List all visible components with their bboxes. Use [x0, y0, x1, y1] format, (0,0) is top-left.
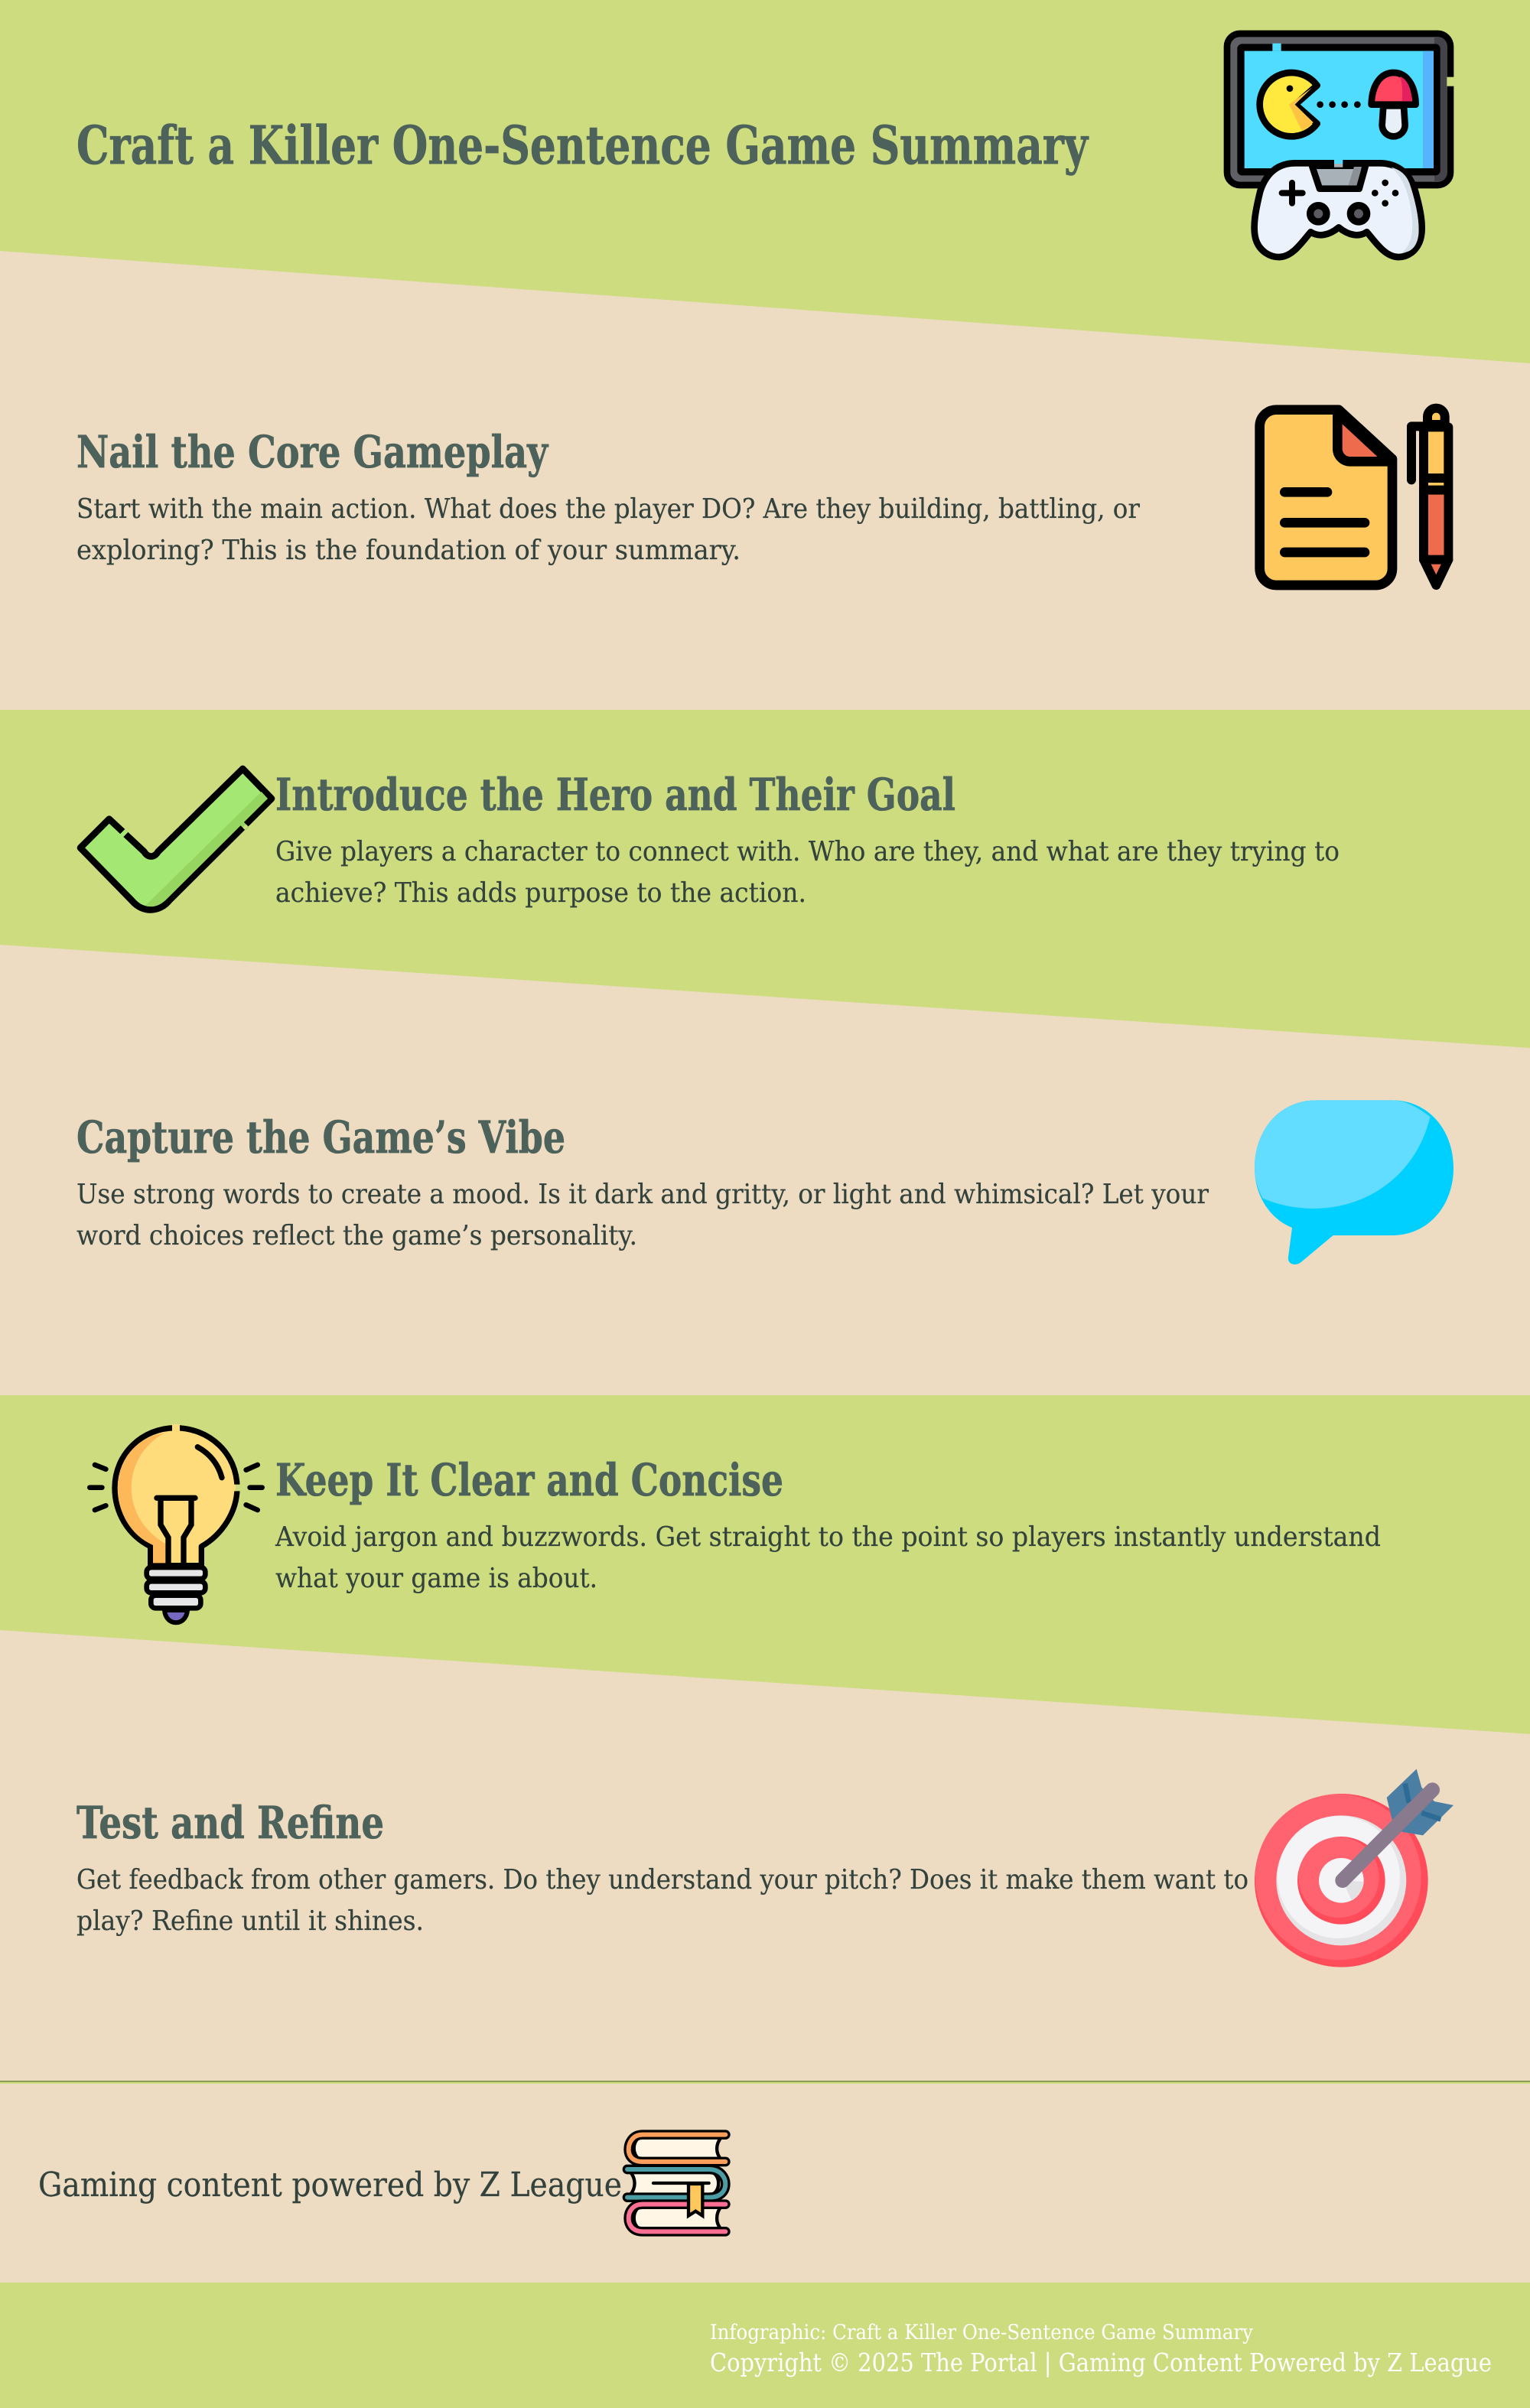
body text: Get feedback from other gamers. Do they understand your pitch? Does it make them want to [76, 1864, 1248, 1895]
body text: play? Refine until it shines. [76, 1905, 424, 1937]
body text: word choices reflect the game’s personality. [76, 1220, 637, 1251]
body text: Avoid jargon and buzzwords. Get straight to the point so players instantly understand [275, 1521, 1381, 1553]
panel: keep it clear [0, 1395, 1530, 1734]
body text: what your game is about. [275, 1563, 597, 1594]
heading: Keep It Clear and Concise [275, 1454, 783, 1506]
body text [76, 1179, 1209, 1251]
panel: footer [0, 2283, 1530, 2408]
icon: check mark [80, 769, 272, 910]
panel: test and refine [76, 1769, 1454, 1967]
panel: title header [0, 0, 1530, 363]
panel background [0, 1395, 1530, 1734]
body text: Use strong words to create a mood. Is it dark and gritty, or light and whimsical? Let your [76, 1179, 1209, 1210]
heading: Capture the Game’s Vibe [76, 1111, 565, 1163]
body text: achieve? This adds purpose to the action. [275, 877, 806, 909]
panel background [0, 710, 1530, 1048]
icon: speech bubble [1255, 1100, 1454, 1264]
icon: light bulb [90, 1428, 262, 1622]
heading: Nail the Core Gameplay [76, 426, 549, 478]
footer background [0, 2283, 1530, 2408]
body text [275, 1521, 1381, 1594]
footer title: Infographic: Craft a Killer One-Sentence Game Summary [710, 2321, 1254, 2345]
panel: powered by [38, 2135, 725, 2231]
title: Craft a Killer One-Sentence Game Summary [76, 115, 1089, 177]
heading: Introduce the Hero and Their Goal [275, 769, 955, 821]
body text [275, 836, 1340, 909]
body text: Start with the main action. What does the player DO? Are they building, battling, or [76, 493, 1140, 525]
heading: Test and Refine [76, 1797, 384, 1849]
body text [76, 1864, 1248, 1937]
powered by text: Gaming content powered by Z League [38, 2166, 622, 2205]
icon: document and pen [1260, 408, 1448, 585]
icon: target with arrow [1255, 1769, 1454, 1967]
body text: Give players a character to connect with. Who are they, and what are they trying to [275, 836, 1340, 867]
body text [76, 493, 1140, 566]
body text: exploring? This is the foundation of your summary. [76, 535, 741, 566]
divider line [0, 2081, 1530, 2084]
header background [0, 0, 1530, 363]
icon: stack of books [627, 2135, 725, 2231]
icon: game screen and controller [1227, 34, 1454, 257]
panel: introduce the hero [0, 710, 1530, 1048]
panel: capture the vibe [76, 1100, 1454, 1264]
panel: nail the core gameplay [76, 408, 1448, 585]
